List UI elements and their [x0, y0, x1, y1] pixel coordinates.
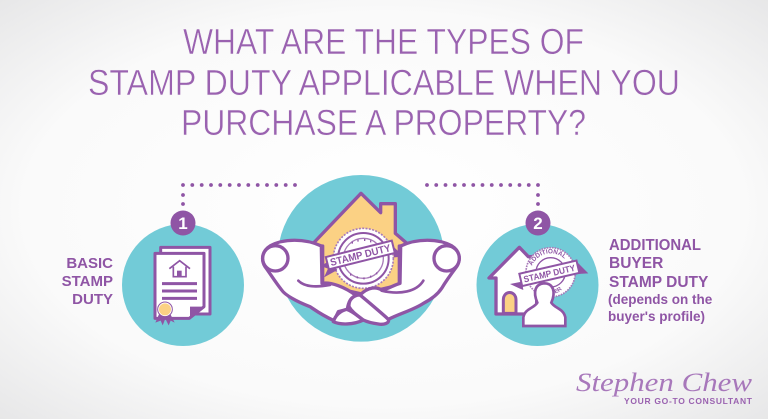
middle finger — [349, 295, 389, 324]
title: STAMP DUTY APPLICABLE WHEN YOU — [88, 62, 680, 103]
label: additional buyer stamp duty: STAMP DUTY — [609, 274, 709, 291]
dotted connector: right — [425, 183, 540, 206]
panel: basic stamp duty — [122, 210, 244, 346]
icon: house, stamp and buyer: ADDITIONAL — [528, 248, 566, 266]
small finger — [333, 309, 363, 324]
label: additional buyer stamp duty: ADDITIONAL — [609, 237, 701, 254]
logo: Stephen Chew signature: YOUR GO-TO CONSULTANT — [624, 396, 753, 406]
label: basic stamp duty: DUTY — [72, 291, 113, 308]
icon: certificate document — [155, 247, 210, 325]
label: basic stamp duty — [62, 255, 113, 308]
teal circle — [278, 175, 444, 342]
icon: house, stamp and buyer — [487, 246, 588, 328]
dotted connector: left — [181, 183, 297, 206]
title: WHAT ARE THE TYPES OF — [183, 21, 584, 62]
label: additional buyer stamp duty — [608, 237, 713, 324]
left hand — [263, 240, 357, 321]
teal circle 1 — [122, 224, 244, 346]
icon: house, stamp and buyer: STAMP DUTY — [523, 263, 576, 284]
stamp seal — [321, 228, 404, 288]
stamp seal: STAMP DUTY — [329, 243, 392, 269]
badge 1: 1 — [178, 214, 188, 233]
logo: Stephen Chew signature: Stephen Chew — [576, 368, 753, 397]
logo: Stephen Chew signature — [576, 368, 753, 406]
title: PURCHASE A PROPERTY? — [181, 102, 586, 143]
right hand — [360, 240, 459, 319]
thumbs — [263, 246, 288, 271]
label: additional buyer stamp duty: buyer's profile) — [608, 309, 705, 324]
label: additional buyer stamp duty: BUYER — [609, 255, 663, 272]
label: basic stamp duty: BASIC — [66, 255, 113, 272]
badge 2: 2 — [533, 214, 543, 233]
teal circle 2 — [476, 224, 598, 346]
house — [311, 193, 410, 294]
palm creases — [298, 281, 423, 293]
icon: house, stamp and buyer: BUYER — [554, 287, 562, 294]
central illustration: hands holding house — [263, 175, 459, 342]
label: additional buyer stamp duty: (depends on the — [608, 292, 713, 307]
title — [88, 21, 680, 143]
label: basic stamp duty: STAMP — [62, 273, 113, 290]
panel: additional buyer stamp duty — [476, 210, 598, 346]
